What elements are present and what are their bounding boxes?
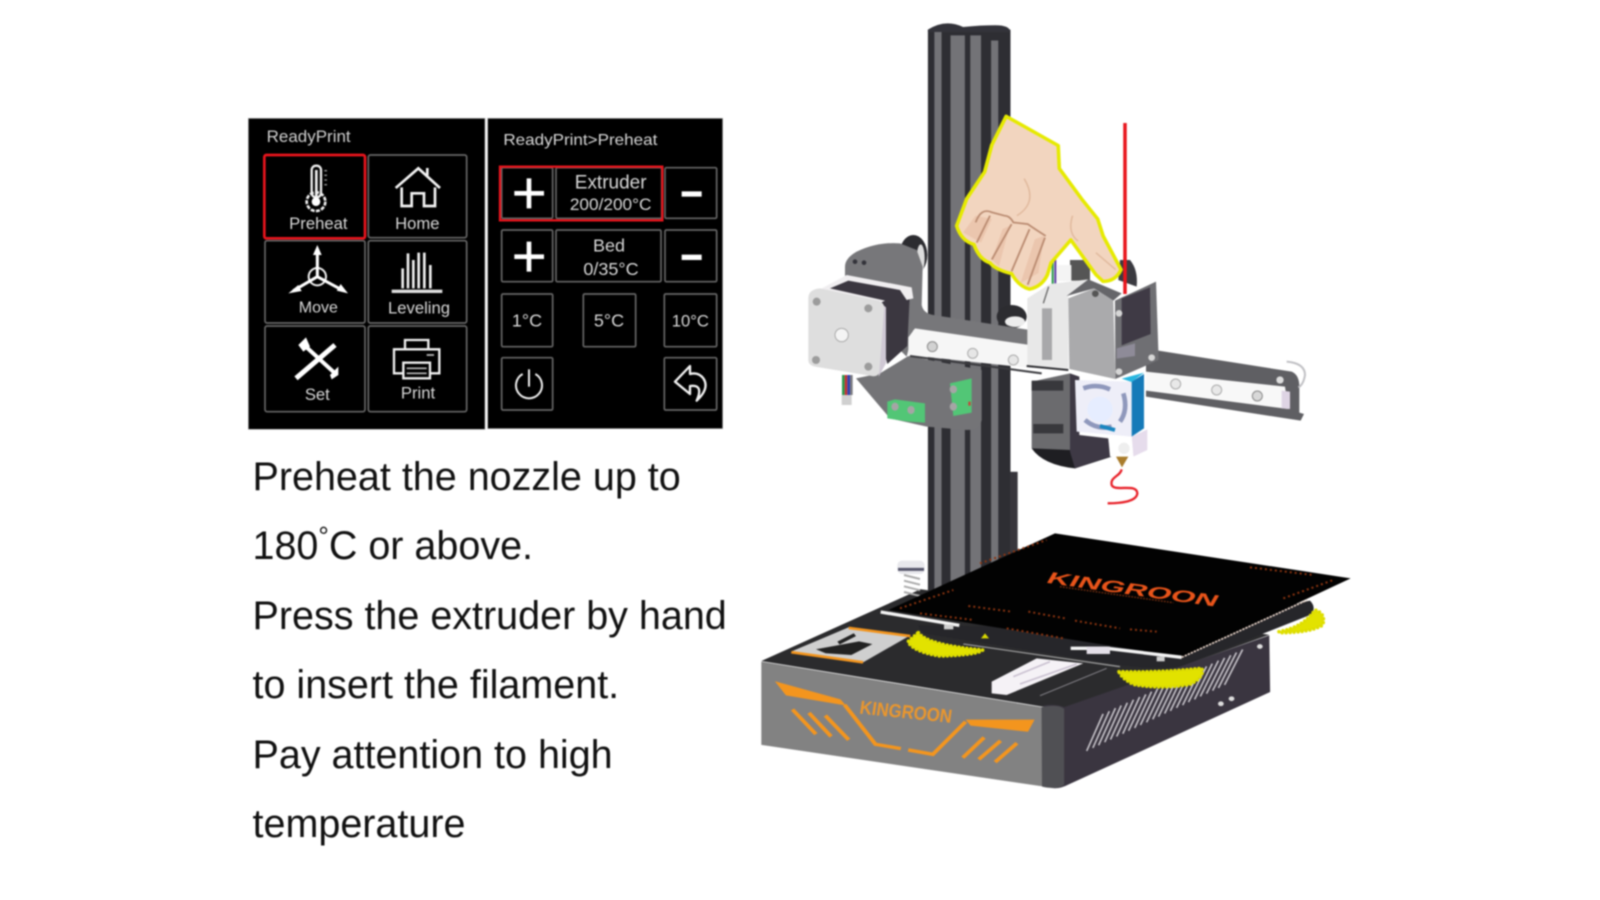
button: Leveling: Leveling — [388, 298, 450, 317]
text block: instructions: C or above. — [329, 524, 533, 568]
button: Preheat — [264, 155, 365, 238]
extruder gear — [1117, 343, 1135, 359]
extruded filament — [1108, 469, 1137, 503]
end pulley — [1287, 362, 1305, 387]
button: extruder minus — [665, 168, 717, 218]
extruder screws — [1116, 310, 1155, 375]
hand shading — [963, 216, 1044, 283]
bed logo: KINGROON — [1043, 568, 1223, 610]
text block: instructions: Pay attention to high — [252, 733, 613, 777]
leveling knob: right — [1279, 610, 1323, 633]
orange front decoration — [775, 681, 1035, 762]
button: Print: Print — [401, 383, 435, 402]
hot end fan — [1075, 380, 1132, 437]
extruder side frame — [1115, 282, 1159, 379]
button: Preheat: Preheat — [289, 214, 348, 233]
button: Move — [265, 241, 365, 323]
bed centre marker — [981, 633, 989, 638]
knuckle and finger lines — [976, 211, 1046, 285]
base front face — [761, 662, 1054, 788]
panel: touchscreen preheat menu — [488, 118, 723, 429]
upper bracket — [845, 243, 1030, 357]
button: 1 degree — [502, 294, 553, 347]
terminal block: horizontal — [887, 399, 925, 423]
x motor — [808, 275, 913, 377]
highlight: extruder selection — [500, 167, 662, 220]
bed plate — [888, 533, 1351, 657]
button: extruder temperature: 200/200°C — [570, 195, 651, 214]
button: bed temperature — [556, 230, 661, 282]
x rail: right — [1146, 351, 1304, 421]
button: 5 degrees: 5°C — [594, 311, 624, 331]
text block: instructions: ° — [318, 521, 329, 551]
cooling shroud — [1032, 373, 1112, 468]
rollers — [899, 235, 1027, 328]
text block: instructions: temperature — [252, 802, 465, 846]
button: Move: Move — [299, 300, 338, 317]
white rail block — [992, 658, 1107, 696]
printer base — [761, 589, 1270, 788]
nozzle — [1116, 457, 1128, 467]
hand — [957, 116, 1121, 289]
button: 10 degrees: 10°C — [672, 312, 709, 331]
button: 5 degrees — [583, 294, 636, 347]
dark panel behind fan — [1070, 373, 1110, 468]
button: bed temperature: 0/35°C — [583, 259, 639, 279]
panel: touchscreen main menu — [248, 118, 485, 429]
leveling knob: rear left — [908, 633, 983, 656]
button: bed minus — [665, 230, 717, 282]
terminal block: vertical — [950, 378, 972, 416]
button: Set — [265, 326, 365, 412]
text block: instructions: 180 — [252, 524, 318, 568]
button: extruder temperature — [556, 168, 662, 218]
button: Home — [368, 155, 467, 238]
tool head — [1027, 260, 1305, 503]
z column — [928, 23, 1018, 603]
button: Set: Set — [305, 385, 330, 404]
sticker — [791, 627, 910, 662]
button: bed plus — [502, 230, 553, 282]
spring knob — [897, 561, 925, 596]
bed edge highlight — [1182, 600, 1307, 657]
bed clips — [881, 612, 1182, 661]
text block: instructions: Preheat the nozzle up to — [252, 455, 681, 499]
heater block — [1108, 429, 1147, 457]
bed carriage — [918, 601, 1314, 668]
button: 1 degree: 1°C — [512, 311, 542, 331]
base top surface — [761, 589, 1269, 709]
text block: instructions: to insert the filament. — [252, 663, 619, 707]
extruder front plate — [1068, 288, 1115, 379]
motor wires — [842, 375, 853, 405]
x rail: left — [908, 328, 1042, 373]
button: extruder plus — [502, 168, 553, 218]
brand name on base: KINGROON — [858, 698, 953, 727]
button: power — [502, 358, 553, 410]
bed area details — [881, 533, 1351, 696]
button: Print — [368, 326, 467, 412]
extruder white housing — [1027, 279, 1088, 370]
carriage underside line — [963, 644, 1120, 667]
button: Home: Home — [395, 214, 440, 233]
lower bracket — [856, 356, 982, 430]
button: bed temperature: Bed — [593, 236, 625, 256]
extruder top — [1067, 279, 1122, 301]
button: 10 degrees — [664, 294, 717, 347]
base right side with vents — [1044, 635, 1270, 788]
bed subtitle — [1060, 587, 1173, 603]
heading: ReadyPrint: ReadyPrint — [267, 128, 351, 146]
leveling knob: front — [1119, 668, 1202, 687]
rear parts behind extruder — [1053, 260, 1137, 287]
extruder side panel — [1122, 287, 1151, 345]
button: extruder temperature: Extruder — [575, 172, 647, 193]
text block: instructions: Press the extruder by hand — [252, 594, 727, 638]
button: back — [664, 358, 717, 410]
heading: ReadyPrint>Preheat: ReadyPrint>Preheat — [503, 132, 658, 149]
text block: instructions — [252, 455, 727, 846]
red guide line — [1123, 123, 1127, 294]
blue duct — [1122, 373, 1144, 437]
button: Leveling — [368, 241, 467, 323]
bed printed markings — [900, 540, 1333, 638]
gantry: left part — [808, 235, 1042, 430]
front corner shading — [1042, 706, 1064, 788]
